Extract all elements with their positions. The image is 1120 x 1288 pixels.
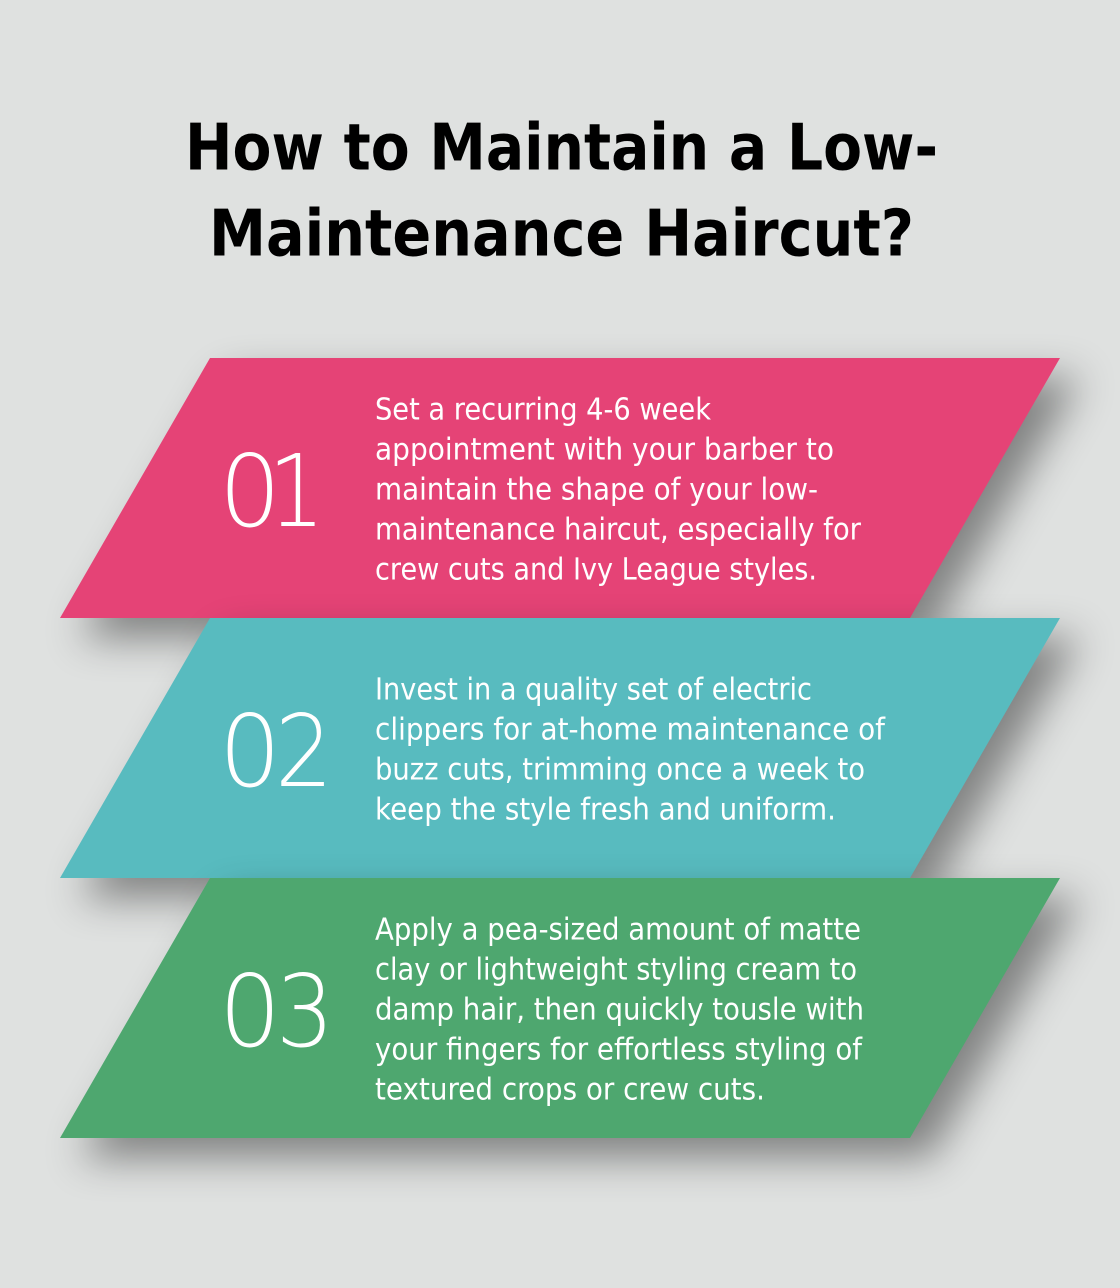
text: step 03: damp hair, then quickly tousle with xyxy=(375,992,864,1028)
text: step 01: appointment with your barber to xyxy=(375,432,834,468)
panel: step 03 xyxy=(60,878,1060,1138)
number 03: 0 xyxy=(219,953,281,1070)
panel: step 01 xyxy=(60,358,1060,618)
text: step 02: buzz cuts, trimming once a week to xyxy=(375,752,865,788)
text: step 01 xyxy=(375,392,862,588)
text: step 02: Invest in a quality set of electric xyxy=(375,672,812,708)
number 02 xyxy=(219,693,333,810)
text: step 01: crew cuts and Ivy League styles. xyxy=(375,552,817,588)
text: step 01: Set a recurring 4-6 week xyxy=(375,392,712,428)
number 01: 0 xyxy=(219,433,281,550)
text: step 02 xyxy=(375,672,886,828)
title xyxy=(185,112,938,272)
text: step 03: clay or lightweight styling cream to xyxy=(375,952,857,988)
number 02: 2 xyxy=(275,693,333,810)
title: Maintenance Haircut? xyxy=(209,198,914,272)
text: step 01: maintain the shape of your low- xyxy=(375,472,818,508)
text: step 01: maintenance haircut, especially for xyxy=(375,512,862,548)
panel: step 02 xyxy=(60,618,1060,878)
pink parallelogram xyxy=(60,358,1060,618)
text: step 03: textured crops or crew cuts. xyxy=(375,1072,765,1108)
teal parallelogram xyxy=(60,618,1060,878)
number 03 xyxy=(219,953,334,1070)
number 03: 3 xyxy=(276,953,334,1070)
text: step 02: clippers for at-home maintenance of xyxy=(375,712,886,748)
number 02: 0 xyxy=(219,693,281,810)
number 01: 1 xyxy=(268,433,325,550)
title: How to Maintain a Low- xyxy=(185,112,938,186)
number 01 xyxy=(219,433,325,550)
text: step 03: your fingers for effortless styling of xyxy=(375,1032,863,1068)
text: step 03 xyxy=(375,912,864,1108)
text: step 02: keep the style fresh and uniform. xyxy=(375,792,836,828)
green parallelogram xyxy=(60,878,1060,1138)
text: step 03: Apply a pea-sized amount of matte xyxy=(375,912,861,948)
